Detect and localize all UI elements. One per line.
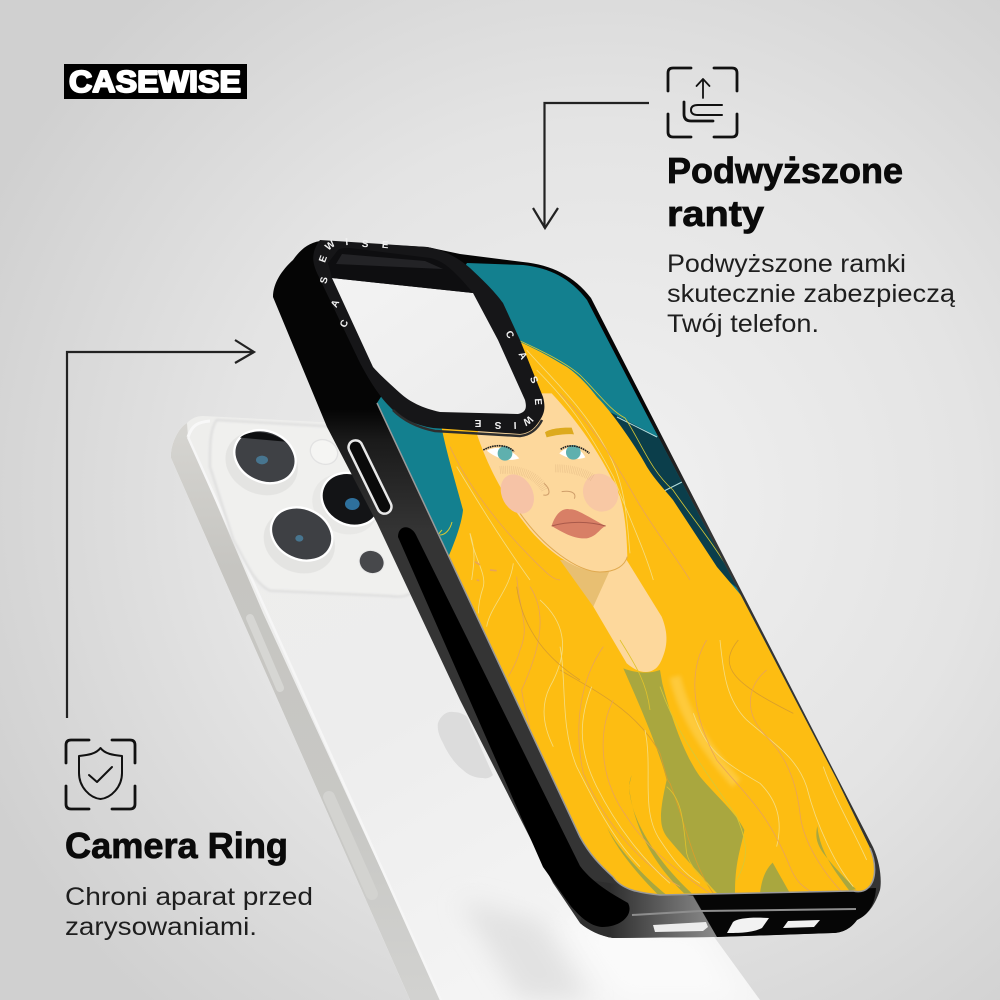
apple logo [438,712,493,778]
text: raised edges description [667,250,955,338]
ring lettering: S [318,276,331,285]
text: raised edges description: Podwyższone ramki [667,250,906,278]
phone case artwork [377,263,874,894]
phone back and side [160,410,780,1000]
freckles [500,468,593,490]
icon: raised edges [668,68,737,137]
ring lettering: C [338,318,351,330]
ring lettering: W [520,413,534,428]
flash [306,435,342,469]
shirt streak right [816,826,856,891]
ring lettering: S [527,375,540,386]
black phone case [273,241,881,938]
teal background [377,263,870,848]
arrow: camera ring callout [67,340,254,718]
text: camera ring description [65,883,313,941]
ring lettering: S [362,239,369,250]
hair [441,336,900,900]
heading: Podwyższone ranty: Podwyższone [667,150,903,191]
ring body [313,240,544,434]
sensor [355,546,388,578]
dark teal area [610,412,740,590]
camera opening [332,278,526,414]
lips [552,509,606,538]
side buttons [250,618,280,688]
ring lettering: E [532,398,543,406]
nose [543,483,575,499]
text: camera ring description: zarysowaniami. [65,913,257,941]
logo: CASEWISE: CASEWISE [69,64,241,99]
art rim highlight [377,403,875,895]
ring lettering: E [474,417,481,428]
lens 2 [253,498,346,585]
eyes [487,448,519,460]
face [477,393,627,572]
white phone behind case [160,410,780,1000]
port openings [653,918,820,933]
lens 3 [302,462,389,546]
lower left hair strands [470,533,580,747]
ring lettering: A [516,350,529,362]
bottom opaque section [693,888,876,937]
bottom translucent section [580,880,717,938]
camera ring [313,237,544,436]
text: raised edges description: skutecznie zabezpieczą [667,280,955,308]
light hair glow [675,677,737,783]
ring lettering: W [323,238,338,253]
side slot [398,527,630,927]
shirt streak center [760,863,790,893]
hair strands [560,640,867,893]
shirt [623,668,744,893]
case volume button [346,438,394,516]
hair outline on teal [520,340,724,564]
camera plateau [210,420,413,597]
lens 1 [215,420,308,507]
arrow: raised edges callout [533,103,649,228]
heading: Camera Ring: Camera Ring [65,825,288,866]
ring lettering: E [317,254,330,264]
case body [273,241,881,938]
cheeks [500,474,534,514]
heading: Podwyższone ranty: ranty [667,193,764,234]
eyebrow [545,428,574,437]
bottom highlight [632,909,856,915]
icon: shield check [66,740,135,809]
ring lettering: C [503,329,516,341]
neck shadow [560,560,610,606]
ring lettering: A [329,298,342,310]
neck light [593,560,666,672]
face and neck [477,393,666,672]
ring lettering: I [513,419,517,430]
ring lettering: I [345,237,349,248]
shirt streak left [629,775,692,893]
upper hair strands [450,350,690,580]
heading: Podwyższone ranty [667,150,903,234]
text: camera ring description: Chroni aparat przed [65,883,313,911]
ring lettering [317,237,543,430]
camera module [210,420,413,597]
ring lettering: S [494,419,501,430]
text: raised edges description: Twój telefon. [667,310,819,338]
inner wall [328,248,473,293]
ring lettering: E [381,240,389,251]
ring highlights [393,410,542,436]
shirt and hair lower [560,640,867,895]
shirt streak thin [607,827,667,895]
